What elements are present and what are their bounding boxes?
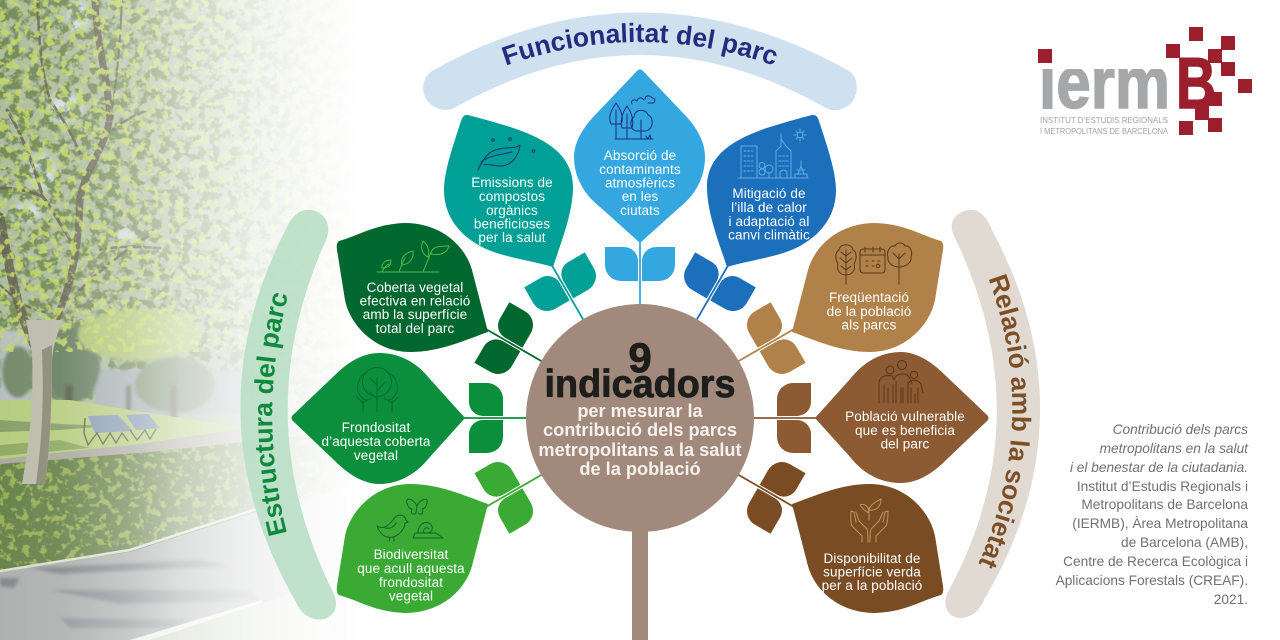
icon: growing sprouts [377,241,449,272]
label: per a la població [822,578,922,593]
icon: family [879,360,923,403]
leaf [792,484,943,613]
leaf [792,223,943,352]
logo: IERMB [1038,27,1252,136]
band: relació [945,210,1040,618]
stem and leaflets [716,442,812,537]
heading: relació amb la societat: Relació amb la societat [978,274,1032,569]
indicator: mitigació [664,115,836,342]
logo wordmark: ierm [1039,43,1170,124]
source credit: i el benestar de la ciutadania. [1070,460,1248,475]
label: Absorció de [604,148,676,163]
label: frondositat [379,575,443,590]
label: amb la superfície [363,307,467,322]
source credit: (IERMB), Àrea Metropolitana [1072,516,1248,531]
lower lawn [0,425,400,572]
road [0,470,420,640]
label: ciutats [620,203,660,218]
stem and leaflets [468,442,564,537]
description: per mesurar la [577,401,704,421]
label: beneficioses [474,216,550,232]
tree trunk [22,320,62,484]
label: atmosfèrics [605,176,675,190]
branches [0,0,160,345]
label: als parcs [842,318,897,332]
leaf [337,484,488,613]
band: funcionalitat [423,12,857,110]
label: de la població [827,304,911,319]
label: canvi climàtic [728,228,810,242]
source credit: metropolitans en la salut [1100,441,1249,456]
source credit: Centre de Recerca Ecològica i [1063,554,1248,569]
label: Frondositat [342,420,410,435]
leaf [815,352,988,483]
description: contribució dels parcs [543,420,737,440]
indicator: absorció [574,70,705,310]
stem and leaflets [605,240,675,310]
indicator: coberta [337,223,564,394]
indicadors: indicadors [544,363,736,406]
indicator: disponibilitat [716,442,943,613]
source credit: Institut d’Estudis Regionals i [1077,479,1248,494]
stem and leaflets [748,383,818,453]
band: estructura [240,210,336,620]
source credit: de Barcelona (AMB), [1121,535,1248,550]
stem and leaflets [664,246,759,342]
leaf [337,223,488,352]
label: que es beneficia [855,423,955,438]
label: d’aquesta coberta [321,434,431,449]
indicator: biodiversitat [337,442,564,613]
icon: forest [357,368,398,412]
heading: estructura del parc: Estructura del parc [254,293,287,536]
label: Disponibilitat de [823,551,921,566]
sky gaps in foliage [14,0,137,243]
leaf [444,115,573,267]
stem and leaflets [468,299,564,394]
stem and leaflets [716,299,812,394]
icon: bird, butterfly and snail [377,499,443,541]
label: l’illa de calor [731,200,807,215]
label: i adaptació al [729,214,809,229]
description: metropolitans a la salut [538,440,742,460]
label: en les [622,189,658,204]
label: del parc [881,436,930,452]
distant trees and buildings [0,309,245,425]
label: efectiva en relació [360,294,470,308]
label: Coberta vegetal [367,280,463,295]
label: superfície verda [823,564,921,580]
logo subtitle: I METROPOLITANS DE BARCELONA [1040,126,1168,136]
white fade over photo [0,0,420,640]
stem and leaflets [462,383,532,453]
grass hill [0,400,400,470]
indicator: població vulnerable [748,352,988,483]
icon: trees and cloud [610,96,655,139]
trunk of tree diagram [632,520,648,640]
label: orgànics [486,203,538,218]
number 9: 9 [628,334,652,381]
label: total del parc [376,321,454,336]
stem and leaflets [521,246,616,342]
source credit: Metropolitans de Barcelona [1081,497,1248,512]
leaf [292,353,465,484]
leaf [574,70,705,243]
label: vegetal [354,448,398,463]
label: per la salut [478,230,546,245]
leaf [707,115,836,267]
description: de la població [579,459,701,479]
label: Emissions de [471,175,553,190]
indicator: freqüentació [716,223,943,394]
icon: leaf with particles [478,138,535,170]
source credit: 2021. [1214,592,1248,607]
footpath [0,418,400,466]
source credit: Aplicacions Forestals (CREAF). [1056,573,1248,588]
heading: funcionalitat del parc: Funcionalitat del parc [502,22,776,66]
icon: city, trees and sun [738,129,808,178]
label: vegetal [389,588,433,604]
source credit: Contribució dels parcs [1113,422,1248,437]
logo subtitle: INSTITUT D’ESTUDIS REGIONALS [1040,115,1168,125]
label: contaminants [599,162,681,177]
indicator: emissions [444,115,616,342]
label: Freqüentació [829,290,909,305]
icon: hands holding a sprout [851,499,888,542]
label: compostos [479,189,545,204]
label: Mitigació de [732,186,806,201]
label: Biodiversitat [374,547,449,562]
logo B: B [1176,44,1216,124]
label: que acull aquesta [357,561,465,576]
central circle [526,304,754,532]
label: Població vulnerable [845,409,965,424]
background photo of park [0,0,326,640]
foliage highlights [0,0,420,352]
bench [84,414,160,445]
icon: trees and calendar [836,243,912,284]
logo squares [1038,27,1252,135]
indicator: frondositat [292,353,532,484]
